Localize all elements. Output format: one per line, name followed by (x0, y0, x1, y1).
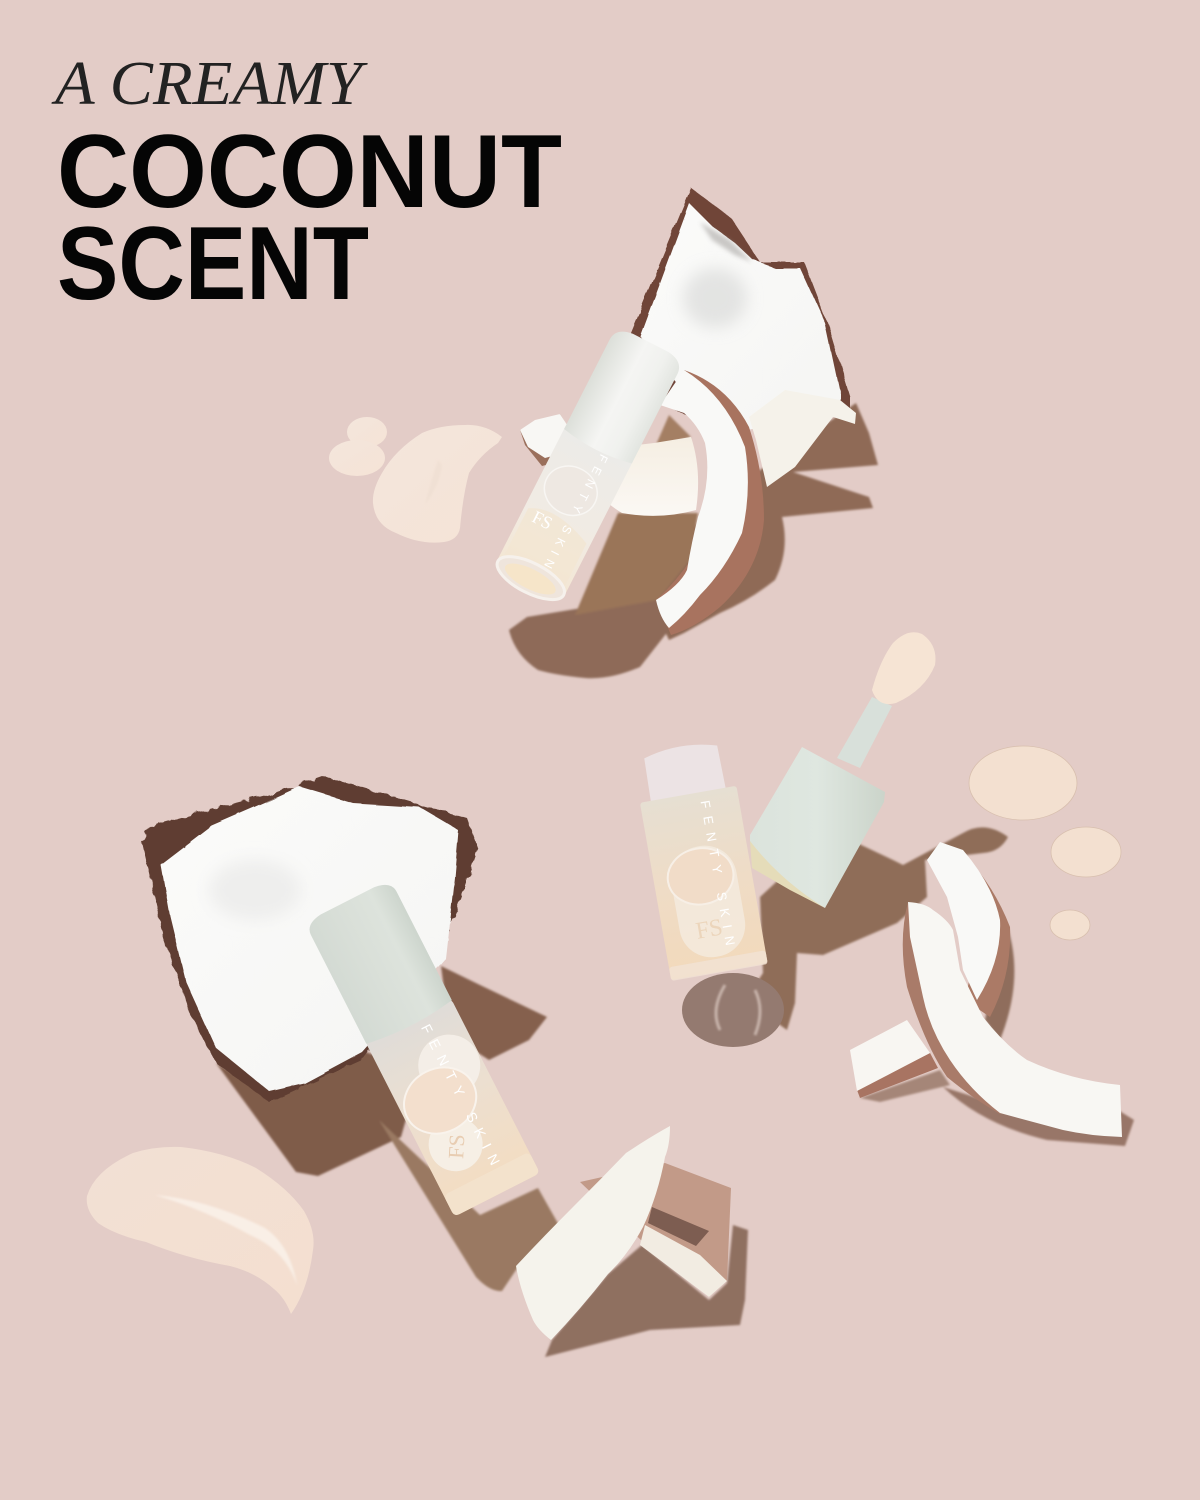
bottle three body (365, 998, 540, 1217)
bottle three brand: FENTY SKIN (418, 1021, 503, 1168)
small drop (1050, 910, 1090, 940)
bottle three logo (393, 1055, 488, 1146)
bottle three cap (305, 879, 454, 1047)
bottle one logo (536, 457, 606, 524)
chunk dark patch (648, 1207, 709, 1246)
cap underside (750, 841, 825, 908)
small broken peel (857, 1053, 938, 1098)
neck (642, 740, 726, 802)
lower droplet (329, 440, 385, 476)
logo (663, 843, 738, 910)
crescent flesh (656, 370, 748, 628)
flesh grey shading (683, 268, 747, 328)
chunk left (520, 414, 585, 466)
applied swatch small drop (329, 417, 387, 476)
right product group (631, 632, 1134, 1146)
glass lens (682, 973, 784, 1047)
title line: scent: SCENT (57, 206, 369, 322)
left chunk flesh (520, 414, 582, 458)
flesh edge shading (700, 222, 752, 262)
bottle one liquid (500, 503, 592, 594)
crescent shell (656, 370, 764, 635)
title (51, 50, 562, 322)
bottle three white blob (408, 1024, 491, 1107)
front crescent flesh (908, 902, 1122, 1137)
front coconut crescent (903, 902, 1122, 1137)
back crescent flesh (927, 842, 1000, 1000)
lower left shadows (216, 966, 748, 1357)
coconut crescent (656, 370, 764, 635)
coconut flesh lower (161, 787, 458, 1091)
coconut flesh top (640, 203, 840, 430)
base rim (669, 950, 768, 981)
coconut shell lower (142, 776, 478, 1102)
brown coconut chunk (580, 1163, 731, 1297)
applied swatch smear (373, 425, 502, 543)
large drop (969, 746, 1077, 820)
flesh soft shading (209, 860, 301, 920)
bottle two open base (631, 738, 768, 981)
bottle three lower oval (419, 1108, 492, 1181)
front crescent shell (903, 902, 1020, 1114)
lens highlight (716, 985, 760, 1035)
bottle one cap (562, 326, 684, 467)
applicator cap (750, 632, 935, 908)
lens shadow (682, 973, 784, 1047)
upper droplet (347, 417, 387, 447)
title line: a creamy: A CREAMY (51, 50, 368, 118)
gel swatch lower (87, 1147, 314, 1314)
small broken piece (850, 1020, 930, 1091)
cap body (750, 747, 885, 908)
bottle one mark: FS (529, 507, 556, 534)
white coconut wedge (516, 1126, 670, 1340)
smear crease (425, 460, 442, 505)
bottle one body (491, 426, 633, 608)
left chunk peel (520, 414, 585, 466)
oil drops (969, 746, 1121, 940)
right group shadows (745, 827, 1134, 1146)
bottle one (490, 326, 684, 609)
white chunk right (749, 390, 856, 487)
back coconut crescent (850, 842, 1010, 1098)
bottle one base rim (491, 548, 571, 608)
applicator stem (837, 697, 892, 768)
bottle one base liquid (501, 557, 560, 601)
title line: coconut: COCONUT (57, 114, 562, 230)
top group shadows (509, 403, 878, 678)
mark: FS (694, 915, 725, 945)
white oval (666, 841, 750, 962)
applicator bulb (872, 632, 935, 704)
medium drop (1051, 827, 1121, 877)
bottle three mark: FS (443, 1134, 469, 1159)
coconut shell top (631, 188, 850, 420)
chunk white side (640, 1225, 727, 1297)
bottle three base (444, 1152, 540, 1217)
cream inner piece (590, 437, 698, 516)
base body (640, 786, 768, 980)
brand: FENTY SKIN (698, 799, 738, 947)
gel gloss (155, 1195, 297, 1285)
bottle three (305, 879, 540, 1217)
back crescent shell (960, 850, 1010, 1017)
top product group (329, 188, 878, 678)
bottle one brand: FENTY SKIN (541, 452, 611, 571)
lower left product group (87, 776, 748, 1357)
